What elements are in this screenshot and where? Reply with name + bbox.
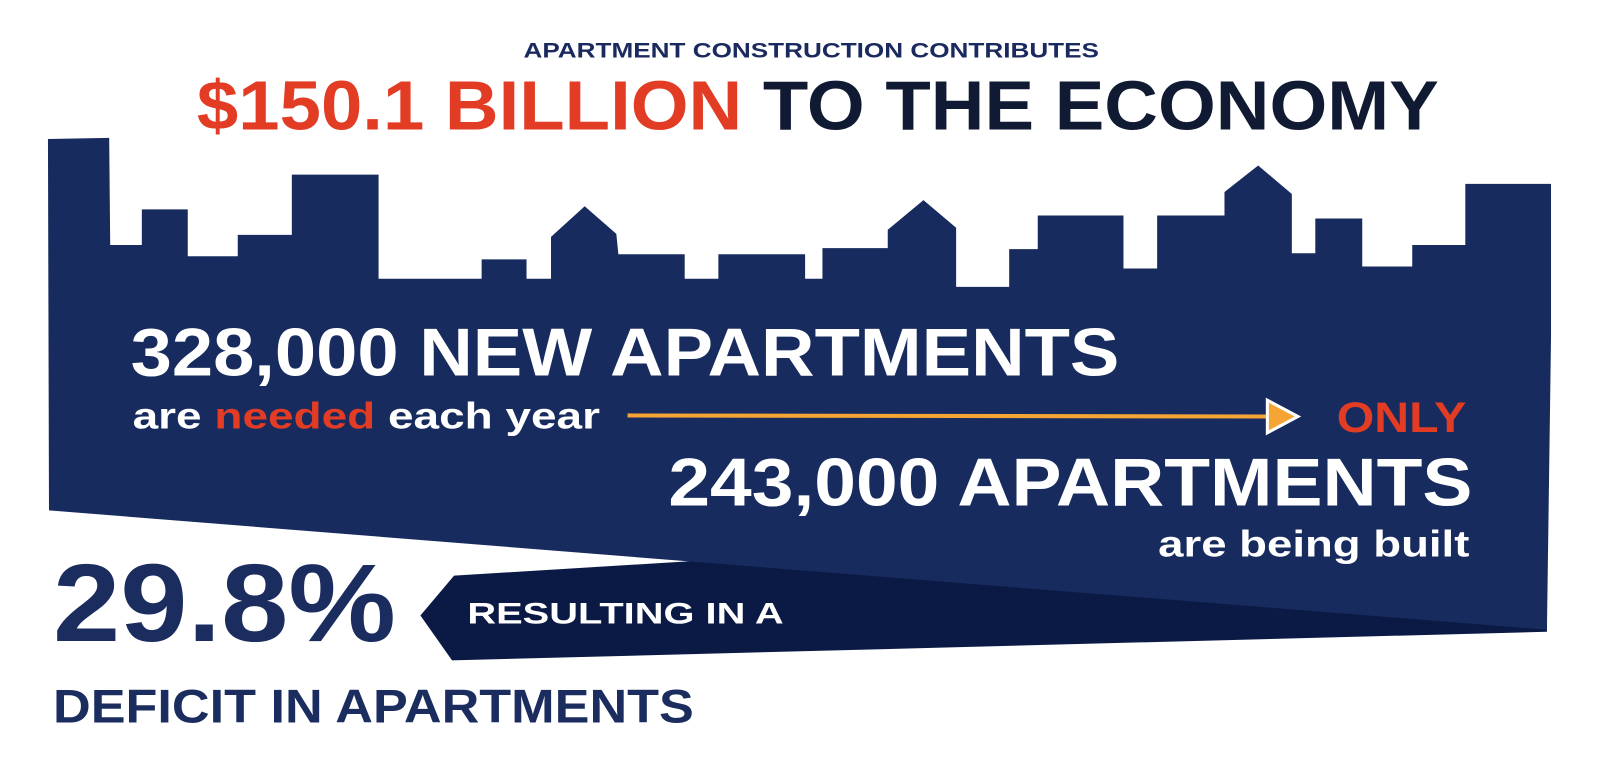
stat: 29.8%: 29.8% (53, 542, 396, 665)
text: 328,000 new apartments: 328,000 NEW APARTMENTS (131, 316, 1119, 391)
ribbon: dark deficit banner (420, 541, 1547, 660)
text: are needed each year: are needed each year (133, 396, 600, 437)
text: deficit in apartments: DEFICIT IN APARTMENTS (53, 681, 694, 733)
arrow (628, 400, 1298, 433)
title: subheading: APARTMENT CONSTRUCTION CONTRIBUTES (523, 38, 1099, 62)
text: resulting in a: RESULTING IN A (467, 598, 784, 631)
title: main heading: $150.1 BILLION TO THE ECONOMY (197, 67, 1439, 145)
text: are being built: are being built (1158, 523, 1469, 564)
text: 243,000 apartments: 243,000 APARTMENTS (668, 445, 1472, 520)
skyline panel (48, 138, 1551, 630)
text: only: ONLY (1337, 394, 1466, 442)
